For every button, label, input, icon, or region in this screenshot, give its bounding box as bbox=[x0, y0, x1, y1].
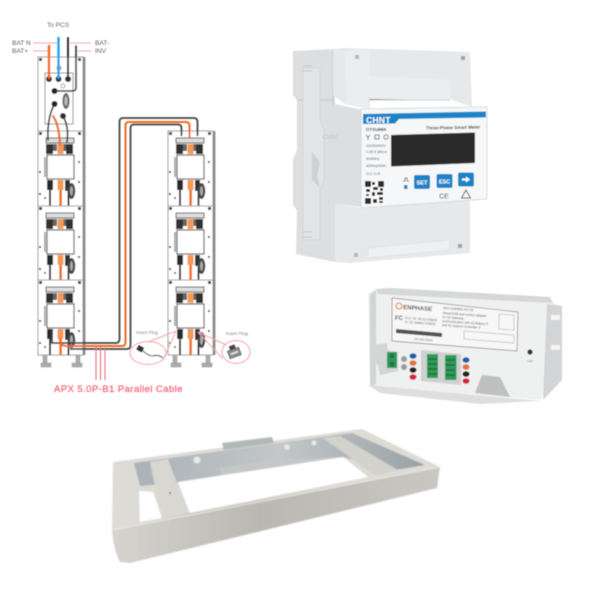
button SET bbox=[414, 175, 430, 189]
label: BAT-: BAT- bbox=[95, 40, 109, 47]
LED: LED bbox=[527, 359, 534, 363]
top control box bbox=[38, 57, 85, 131]
brand ENPHASE: ENPHASE bbox=[403, 305, 432, 313]
right battery stack bbox=[168, 131, 215, 367]
frame front face bbox=[112, 467, 440, 563]
button SET: SET bbox=[417, 180, 428, 186]
brand ENPHASE bbox=[396, 303, 432, 313]
connector recess bbox=[421, 350, 461, 385]
FCC mark and IDs bbox=[395, 316, 437, 326]
screw marker bbox=[169, 492, 171, 494]
label: To PCS: To PCS bbox=[47, 22, 70, 29]
product name: Three-Phase Smart Meter bbox=[426, 125, 481, 130]
callout ellipses bbox=[130, 331, 250, 364]
meter side details bbox=[297, 49, 340, 240]
insert plug callouts bbox=[130, 330, 250, 364]
product: Enphase comms kit bbox=[368, 288, 562, 404]
shadow bbox=[368, 385, 540, 404]
LED bbox=[527, 349, 534, 363]
meter side details: CHNT bbox=[323, 135, 340, 141]
label: BAT+: BAT+ bbox=[12, 48, 28, 55]
model and description: Wired ESB and control adapter bbox=[443, 311, 488, 318]
FCC mark and IDs: FC bbox=[395, 316, 404, 322]
rail holes bbox=[194, 440, 316, 464]
spec lines: 3X230/400V bbox=[366, 144, 386, 148]
model and description: for IQ Gateway bbox=[442, 315, 464, 320]
red cable leaders bbox=[96, 345, 105, 380]
parallel cable loop bbox=[52, 118, 198, 349]
model and description: SKU-COMMS-KIT-02 bbox=[443, 306, 474, 312]
warning triangle bbox=[462, 190, 470, 198]
device text below barcode: P/N 865-05000 bbox=[414, 337, 433, 342]
meter left side housing bbox=[293, 49, 362, 262]
button ESC bbox=[436, 174, 452, 188]
meter bottom block bbox=[335, 198, 470, 263]
device body bbox=[368, 288, 562, 400]
meter front panel bbox=[361, 107, 487, 208]
left battery stack bbox=[38, 57, 85, 367]
button ESC: ESC bbox=[439, 180, 450, 186]
label: Insert Plug left: Insert Plug bbox=[136, 330, 158, 335]
FCC mark and IDs: FCC ID: MCQ-XSB03 bbox=[405, 316, 437, 322]
device top edge bbox=[376, 288, 553, 303]
model and description bbox=[442, 306, 489, 330]
icon: left plug bbox=[136, 345, 163, 358]
feet bbox=[41, 355, 82, 367]
metal rail bbox=[134, 433, 425, 486]
wire colour markers bbox=[401, 353, 470, 384]
cable notch bbox=[475, 375, 510, 397]
callout lines for terminals bbox=[33, 43, 91, 51]
green terminal block 2 bbox=[445, 355, 456, 380]
model and description: and IQ System Controller 3 bbox=[442, 323, 481, 330]
parallel cable wiring diagram bbox=[12, 22, 250, 395]
right bracket holes bbox=[551, 315, 560, 350]
spec symbols bbox=[366, 135, 388, 140]
spec lines: 0.25-5 (80) A bbox=[366, 150, 387, 154]
label: BAT N: BAT N bbox=[12, 40, 31, 47]
right cross plate bbox=[323, 436, 398, 476]
product: mounting bracket frame bbox=[112, 429, 440, 563]
back tab bbox=[222, 437, 274, 450]
cables from top terminals bbox=[48, 38, 76, 145]
label boxes bbox=[464, 314, 514, 343]
display bbox=[391, 132, 475, 166]
left cross plate bbox=[150, 459, 188, 519]
model number: DTSU666 bbox=[366, 127, 387, 132]
device side shading bbox=[370, 290, 562, 400]
spec lines: 400imp/kWh bbox=[366, 164, 386, 168]
spec lines bbox=[366, 144, 387, 176]
spec lines: Cl.1 Cl.B bbox=[366, 172, 381, 176]
model and description: communication with IQ Battery 5 bbox=[442, 319, 488, 326]
QR code bbox=[365, 181, 384, 204]
rail lower ledge bbox=[220, 457, 346, 475]
spec lines: 50/60Hz bbox=[366, 157, 380, 161]
left bracket and green connector bbox=[373, 343, 398, 375]
button arrow bbox=[458, 172, 474, 186]
brand CHNT: CHNT bbox=[366, 115, 391, 125]
label panel bbox=[392, 298, 518, 351]
barcode bbox=[396, 329, 442, 337]
small opening bbox=[139, 491, 162, 522]
meter top block bbox=[333, 48, 472, 109]
green terminal block 1 bbox=[427, 354, 438, 378]
frame top face bbox=[112, 429, 440, 530]
icon: right plug bbox=[226, 343, 241, 359]
meter blue header bbox=[363, 112, 486, 124]
pulse led bbox=[403, 178, 409, 189]
label: INV: INV bbox=[95, 48, 107, 55]
product: three-phase smart meter bbox=[293, 48, 487, 263]
large opening bbox=[178, 457, 368, 513]
CE mark: CE bbox=[439, 194, 449, 200]
FCC mark and IDs: IC ID: 9468A-XSB03 bbox=[405, 320, 436, 326]
caption: parallel cable: APX 5.0P-B1 Parallel Cable bbox=[54, 384, 183, 395]
front face top highlight bbox=[112, 467, 440, 530]
label: Insert Plug right: Insert Plug bbox=[226, 331, 248, 336]
